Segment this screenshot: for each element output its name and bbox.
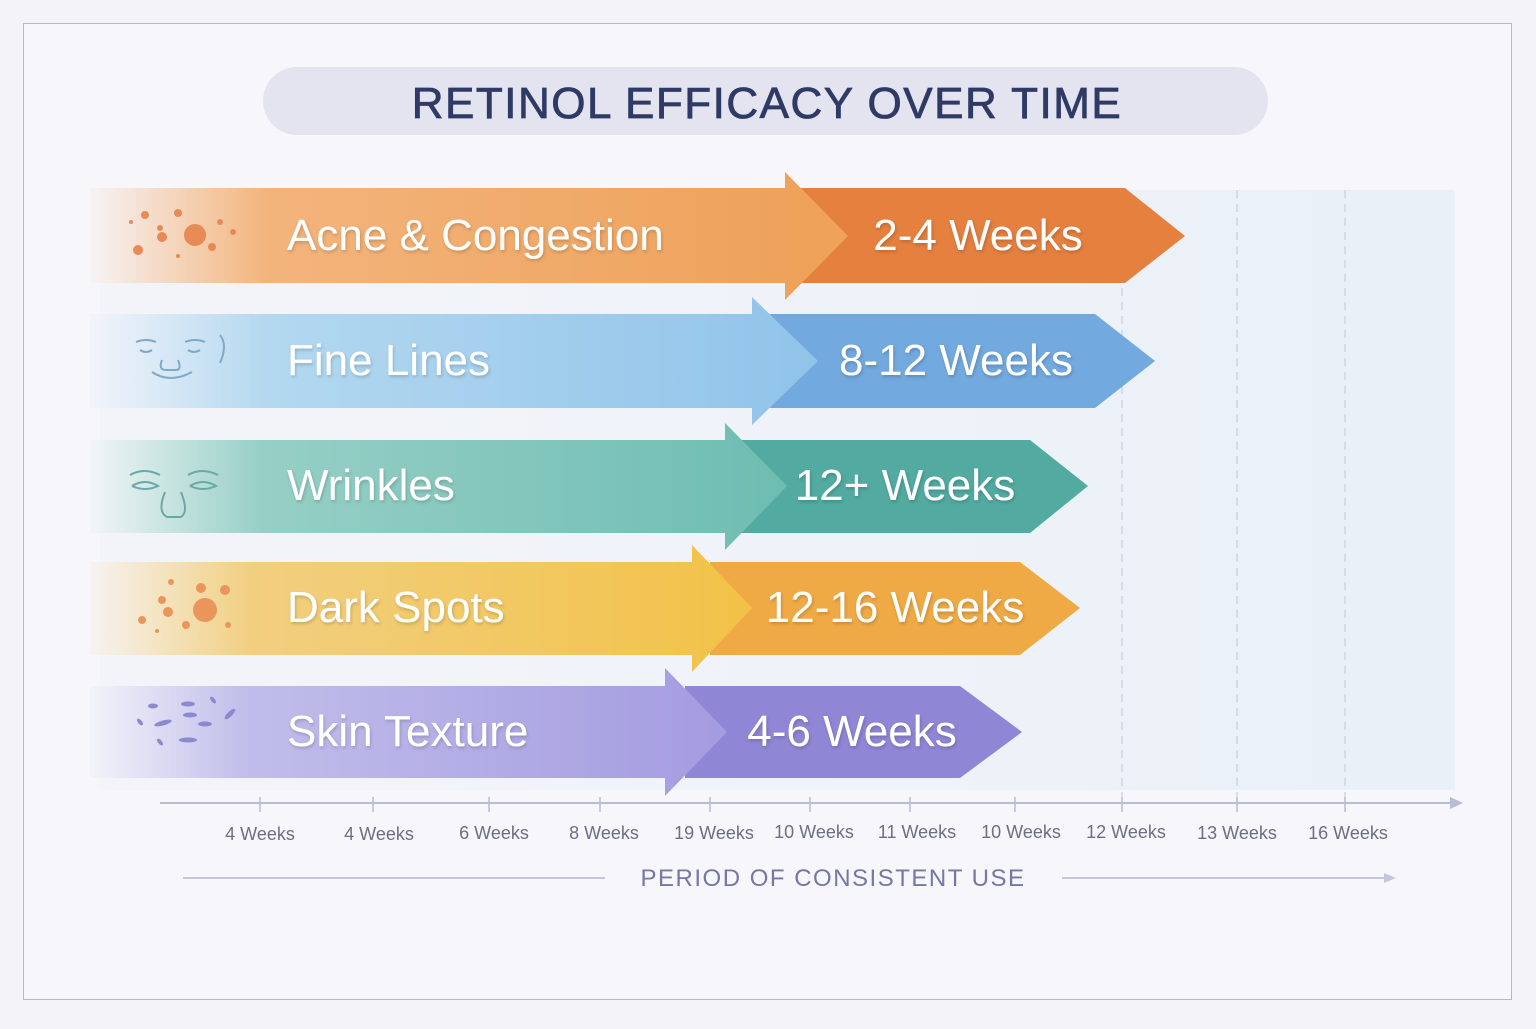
- icon: face eyes: [130, 471, 218, 517]
- x axis: 12 Weeks: [1086, 822, 1166, 842]
- arrow: dark spots: 12-16 Weeks: [766, 583, 1024, 632]
- arrow: acne: Acne & Congestion: [287, 211, 664, 260]
- arrow: fine lines: 8-12 Weeks: [839, 336, 1073, 385]
- arrow: fine lines: [90, 297, 1155, 425]
- title: RETINOL EFFICACY OVER TIME: [412, 79, 1122, 128]
- arrow: skin texture: Skin Texture: [287, 707, 528, 756]
- x axis: 4 Weeks: [225, 824, 295, 844]
- x axis: 6 Weeks: [459, 823, 529, 843]
- arrow: dark spots: [90, 545, 1080, 672]
- x axis: 19 Weeks: [674, 823, 754, 843]
- arrow: wrinkles: Wrinkles: [287, 461, 455, 510]
- title: [263, 67, 1268, 135]
- arrow: fine lines: Fine Lines: [287, 336, 490, 385]
- arrow: acne: 2-4 Weeks: [873, 211, 1083, 260]
- axis title: [183, 865, 1396, 892]
- icon: face smile: [136, 335, 224, 378]
- x axis: 10 Weeks: [981, 822, 1061, 842]
- x axis: [160, 797, 1463, 844]
- arrow: wrinkles: 12+ Weeks: [795, 461, 1015, 510]
- icon: acne dots: [129, 209, 236, 258]
- x axis: 8 Weeks: [569, 823, 639, 843]
- x axis: 16 Weeks: [1308, 823, 1388, 843]
- x axis: 13 Weeks: [1197, 823, 1277, 843]
- axis title: PERIOD OF CONSISTENT USE: [641, 865, 1025, 892]
- arrow: skin texture: 4-6 Weeks: [747, 707, 957, 756]
- icon: texture flecks: [136, 696, 237, 746]
- arrow: dark spots: Dark Spots: [287, 583, 505, 632]
- icon: spots: [138, 579, 231, 633]
- x axis: 4 Weeks: [344, 824, 414, 844]
- arrow: wrinkles: [90, 423, 1088, 550]
- chart background panel: [100, 190, 1455, 790]
- arrow: acne: [90, 172, 1185, 300]
- arrow: skin texture: [90, 668, 1022, 796]
- x axis: 11 Weeks: [878, 822, 956, 842]
- x axis: 10 Weeks: [774, 822, 854, 842]
